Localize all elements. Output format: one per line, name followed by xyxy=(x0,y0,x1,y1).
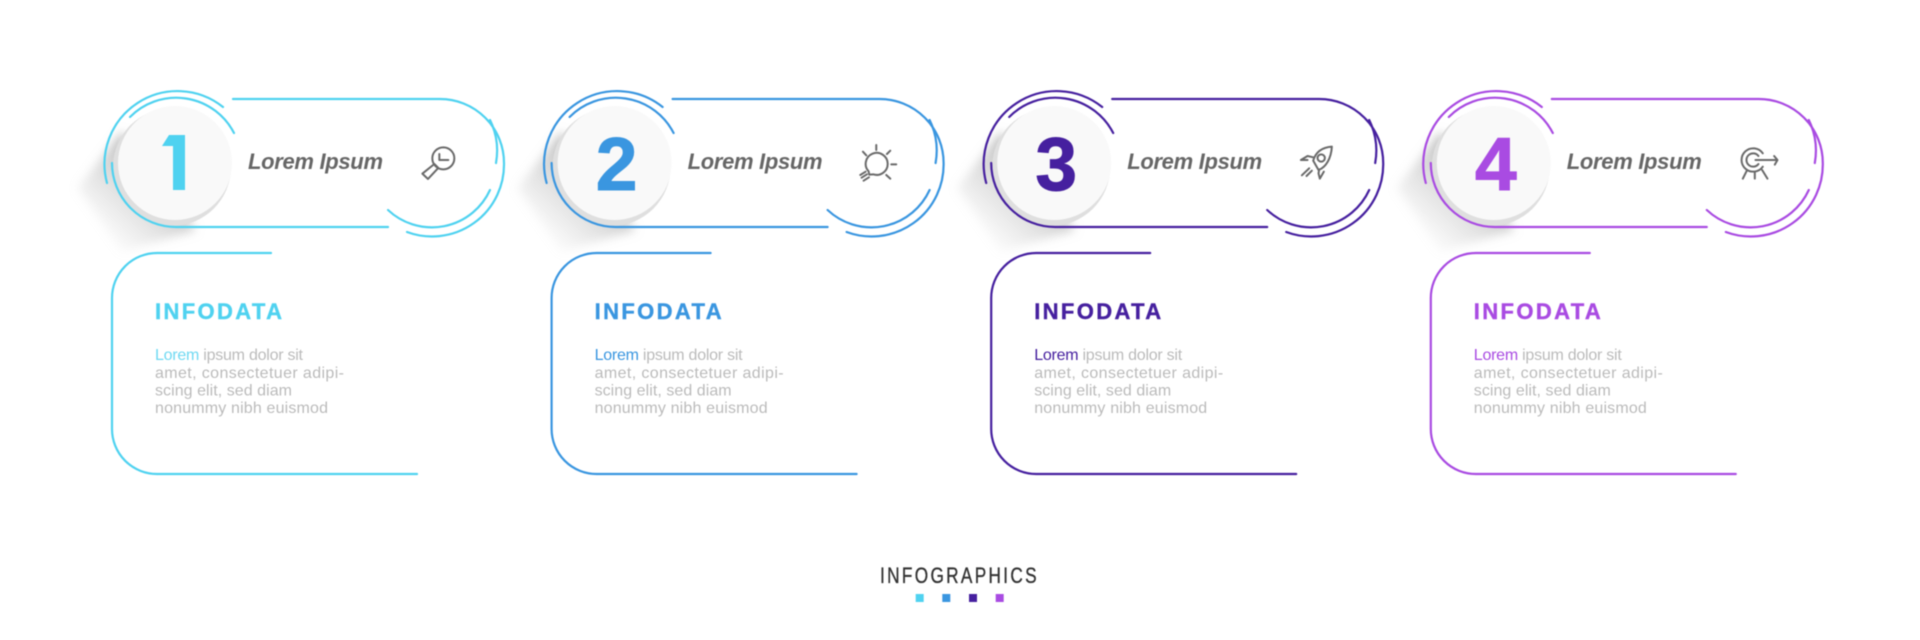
number: 2 xyxy=(596,122,637,206)
number disc xyxy=(992,106,1111,226)
info body: amet, consectetuer adipi- xyxy=(595,365,784,382)
long shadow xyxy=(518,132,636,252)
icon: light bulb xyxy=(860,145,896,181)
panel: step 4 xyxy=(1397,91,1823,474)
info body: nonummy nibh euismod xyxy=(1474,400,1647,417)
info box outline xyxy=(112,253,417,474)
number disc xyxy=(1432,106,1551,226)
info body: amet, consectetuer adipi- xyxy=(155,365,344,382)
info title: INFODATA xyxy=(1034,299,1161,324)
info body: nonummy nibh euismod xyxy=(1034,400,1207,417)
info box outline xyxy=(1431,253,1736,474)
info body: nonummy nibh euismod xyxy=(155,400,328,417)
info body: scing elit, sed diam xyxy=(1474,382,1611,400)
step heading: Lorem Ipsum xyxy=(248,149,383,174)
info body: Lorem ipsum dolor sit xyxy=(1474,347,1622,364)
info body: scing elit, sed diam xyxy=(595,382,732,400)
long shadow xyxy=(1397,132,1515,252)
info title: INFODATA xyxy=(595,299,722,324)
info body xyxy=(1474,347,1663,417)
footer colour squares xyxy=(916,594,1004,602)
number: 1 xyxy=(158,122,200,206)
number xyxy=(162,134,186,191)
info title: INFODATA xyxy=(155,299,282,324)
info body: Lorem ipsum dolor sit xyxy=(155,347,304,364)
number disc xyxy=(553,106,672,226)
step heading: Lorem Ipsum xyxy=(1127,149,1262,174)
info body: Lorem ipsum dolor sit xyxy=(1034,347,1183,364)
panel: step 2 xyxy=(518,91,944,474)
info body xyxy=(155,347,344,417)
info body: scing elit, sed diam xyxy=(155,382,292,400)
info title: INFODATA xyxy=(1474,299,1601,324)
number: 3 xyxy=(1035,122,1077,206)
footer title: INFOGRAPHICS xyxy=(880,563,1039,588)
info body xyxy=(595,347,784,417)
header outline xyxy=(544,91,944,236)
long shadow xyxy=(78,132,196,252)
info box outline xyxy=(552,253,857,474)
header outline xyxy=(105,91,504,236)
icon: rocket xyxy=(1301,147,1332,179)
info body: scing elit, sed diam xyxy=(1034,382,1171,400)
panel: step 3 xyxy=(957,91,1383,474)
icon: target xyxy=(1742,148,1777,179)
long shadow xyxy=(957,132,1075,252)
icon: clock magnifier xyxy=(422,147,454,179)
info body: amet, consectetuer adipi- xyxy=(1034,365,1223,382)
info body xyxy=(1034,347,1223,417)
header outline xyxy=(984,91,1383,236)
number: 4 xyxy=(1475,122,1517,206)
info box outline xyxy=(991,253,1296,474)
info body: Lorem ipsum dolor sit xyxy=(595,347,743,364)
info body: amet, consectetuer adipi- xyxy=(1474,365,1663,382)
panel: step 1 xyxy=(78,91,504,474)
info body: nonummy nibh euismod xyxy=(595,400,768,417)
step heading: Lorem Ipsum xyxy=(1567,149,1702,174)
number disc xyxy=(113,106,232,226)
step heading: Lorem Ipsum xyxy=(688,149,823,174)
header outline xyxy=(1423,91,1823,236)
